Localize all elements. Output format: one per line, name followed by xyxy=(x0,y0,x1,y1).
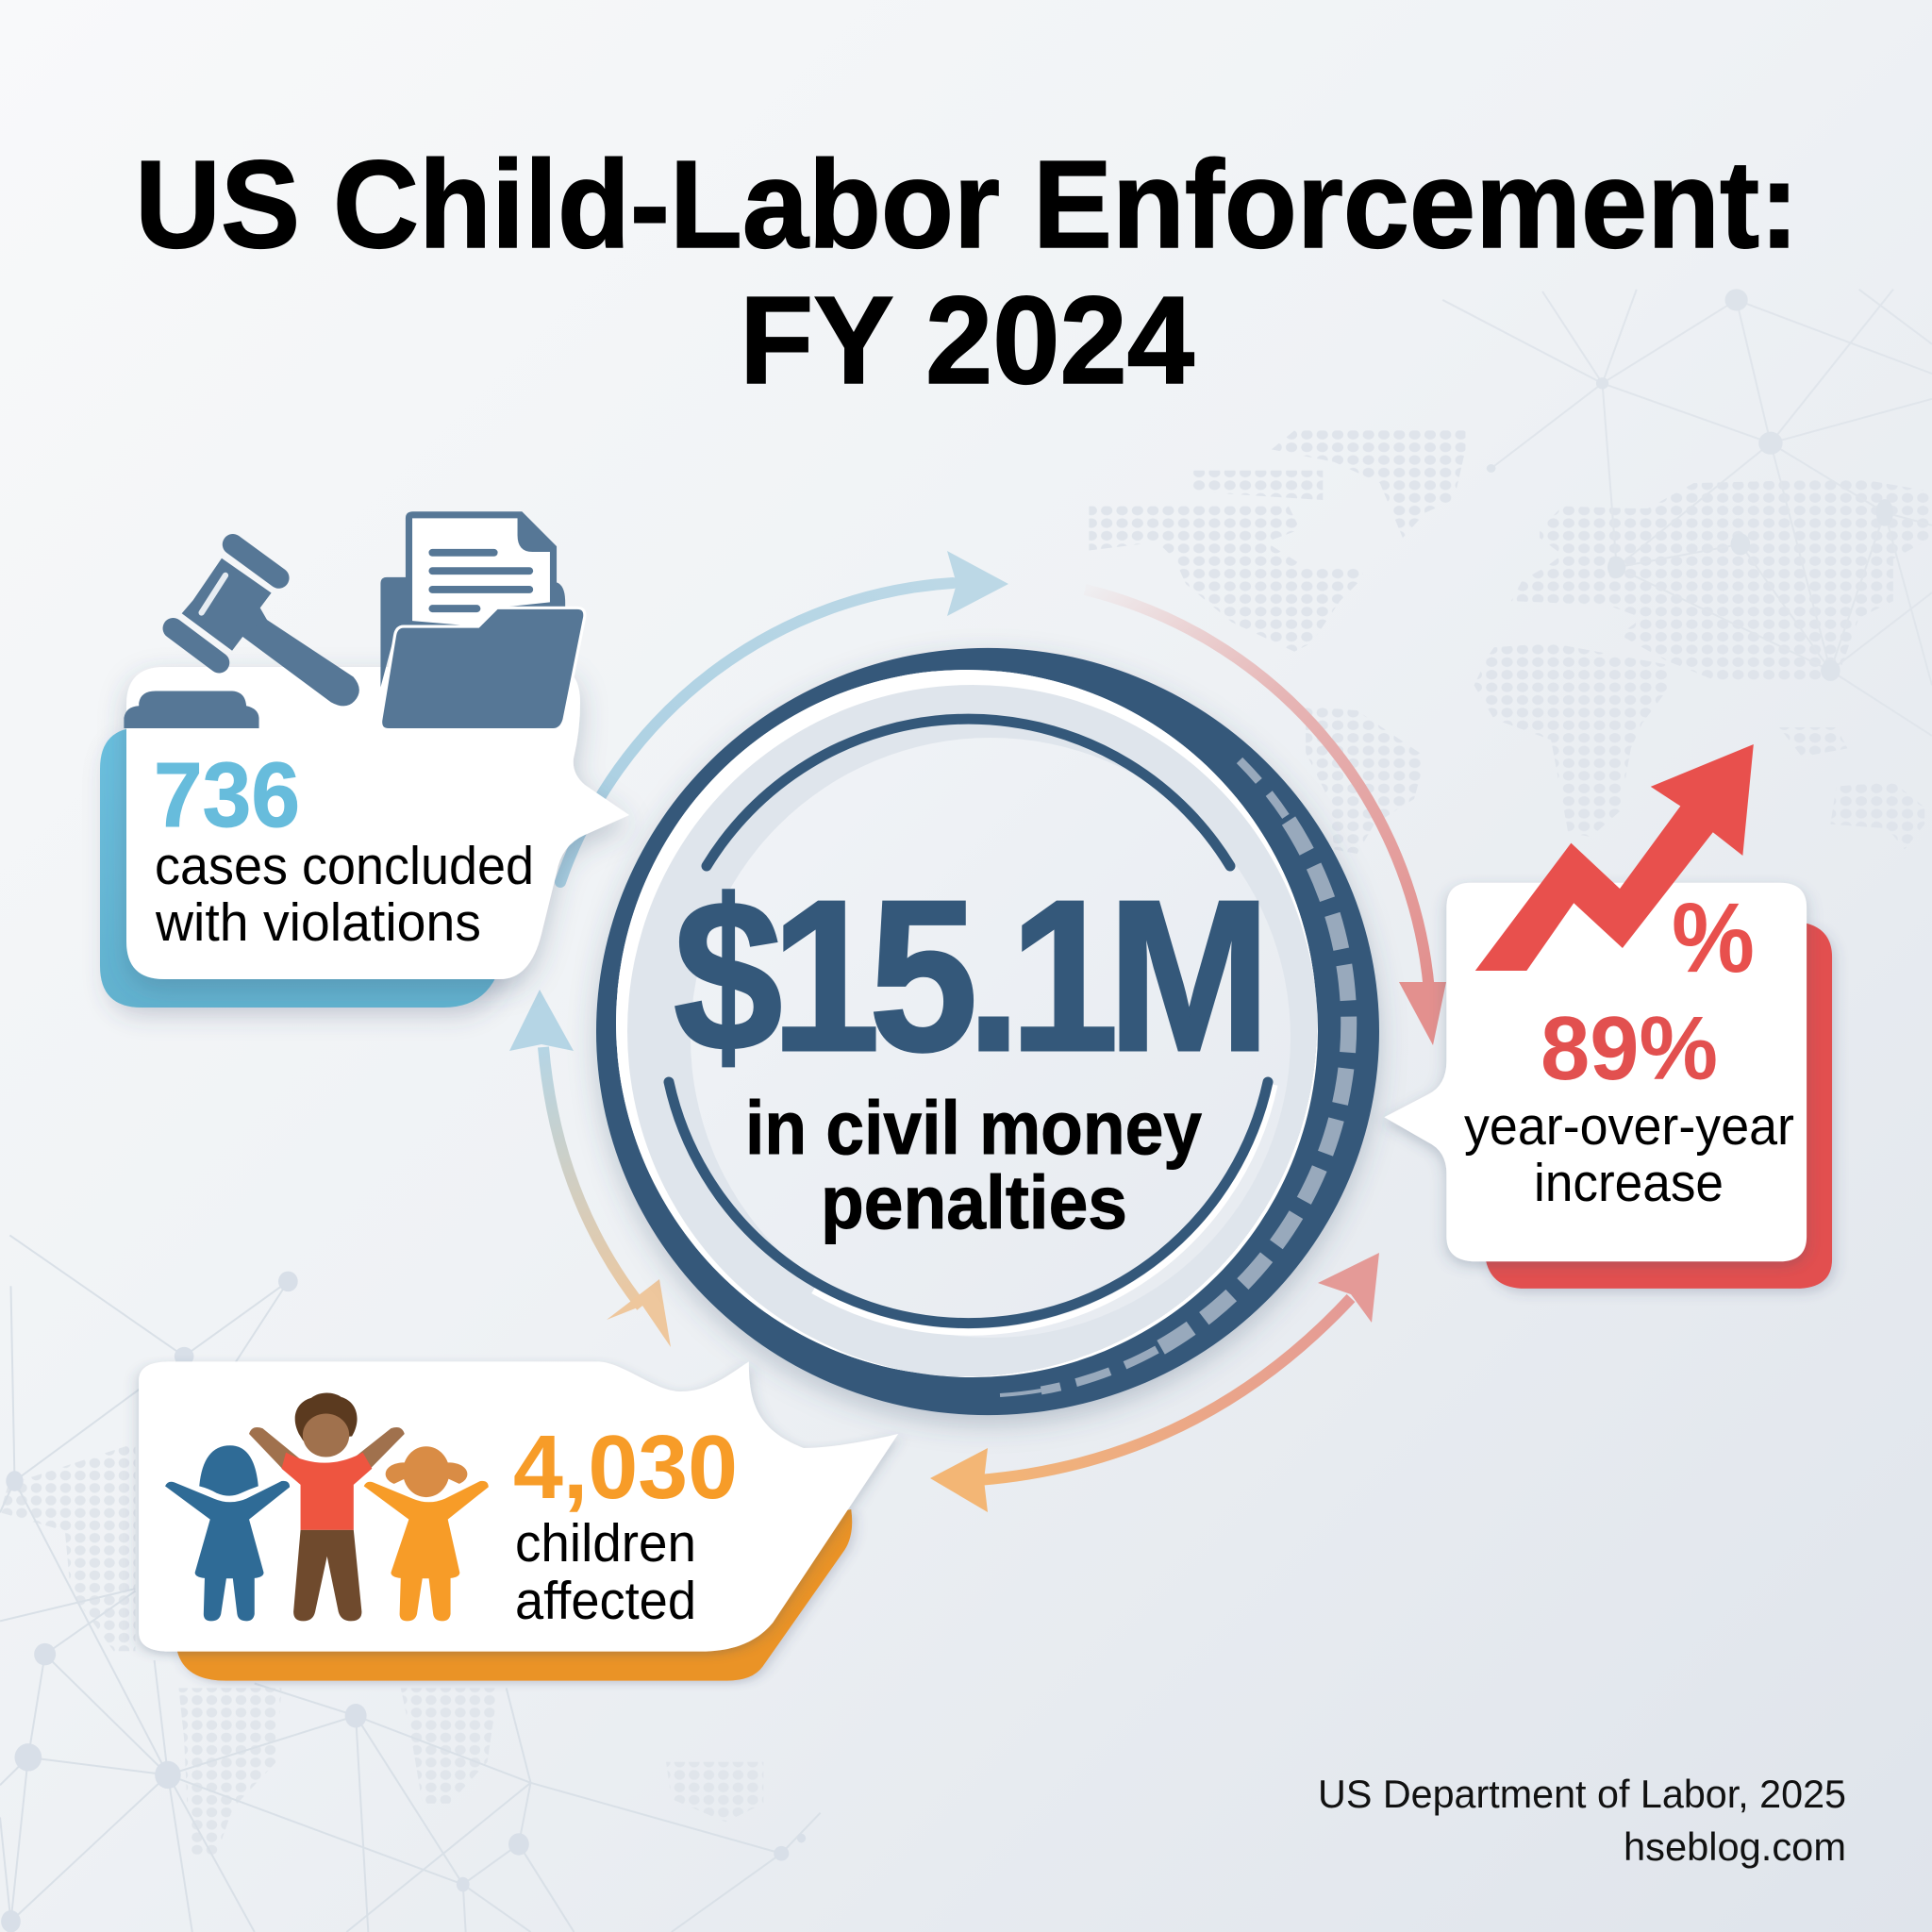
label: cases concluded with violations xyxy=(155,836,534,953)
label: children affected xyxy=(515,1513,696,1631)
icon: folder with document xyxy=(380,511,585,730)
card backing red xyxy=(1486,924,1832,1289)
child: middle xyxy=(249,1393,405,1621)
label: children affected: affected xyxy=(515,1571,696,1631)
panel: children affected xyxy=(139,1361,898,1681)
coin inner face xyxy=(616,670,1318,1377)
coin edge dashes xyxy=(1000,760,1349,1395)
icon: percent sign: % xyxy=(1672,883,1755,993)
label: children affected: children xyxy=(515,1513,696,1574)
card body with pointer xyxy=(139,1361,898,1652)
label: cases concluded with violations: cases concluded xyxy=(155,836,534,896)
coin outer ring xyxy=(596,648,1379,1415)
headline caption: in civil money xyxy=(745,1086,1202,1170)
headline figure: $15.1M xyxy=(674,857,1259,1096)
label: cases concluded with violations: with violations xyxy=(155,892,481,953)
arrow: cases to children (double-headed) xyxy=(509,990,671,1347)
label: year-over-year increase: increase xyxy=(1534,1153,1724,1213)
card body with pointer xyxy=(1384,883,1807,1261)
arrow: children to increase (double-headed) xyxy=(930,1253,1379,1512)
source credit: hseblog.com xyxy=(1624,1824,1846,1869)
title: US Child-Labor Enforcement: xyxy=(135,135,1799,274)
icon: three children xyxy=(165,1393,489,1621)
card body with pointer xyxy=(126,667,629,979)
network lines: lower left xyxy=(0,1235,821,1932)
arrow: cases to total xyxy=(560,551,1008,882)
central coin xyxy=(596,648,1379,1415)
label: year-over-year increase xyxy=(1464,1096,1794,1213)
source credit: US Department of Labor, 2025 xyxy=(1318,1772,1846,1816)
icon: rising arrow xyxy=(1475,744,1754,971)
stat: 736: 736 xyxy=(154,743,300,846)
panel: year-over-year increase xyxy=(1384,744,1832,1289)
coin inner arcs xyxy=(669,719,1268,1324)
arrow: total to increase xyxy=(1085,590,1446,1045)
icon: gavel xyxy=(124,544,359,728)
title xyxy=(135,135,1799,409)
child: blue xyxy=(165,1445,290,1621)
network lines: upper right xyxy=(1442,289,1932,736)
title: FY 2024 xyxy=(740,271,1194,409)
source credit xyxy=(1318,1772,1846,1869)
stat: 4,030: 4,030 xyxy=(513,1417,738,1518)
world map dots: upper right xyxy=(1089,430,1932,854)
headline caption xyxy=(745,1086,1202,1244)
card backing blue xyxy=(100,727,505,1008)
world map dots: lower left xyxy=(0,1443,763,1855)
stat: 89%: 89% xyxy=(1541,998,1718,1099)
panel: cases concluded xyxy=(100,511,629,1008)
headline caption: penalties xyxy=(821,1160,1127,1244)
label: year-over-year increase: year-over-year xyxy=(1464,1096,1794,1157)
card backing orange xyxy=(177,1509,852,1681)
child: orange xyxy=(364,1446,489,1621)
